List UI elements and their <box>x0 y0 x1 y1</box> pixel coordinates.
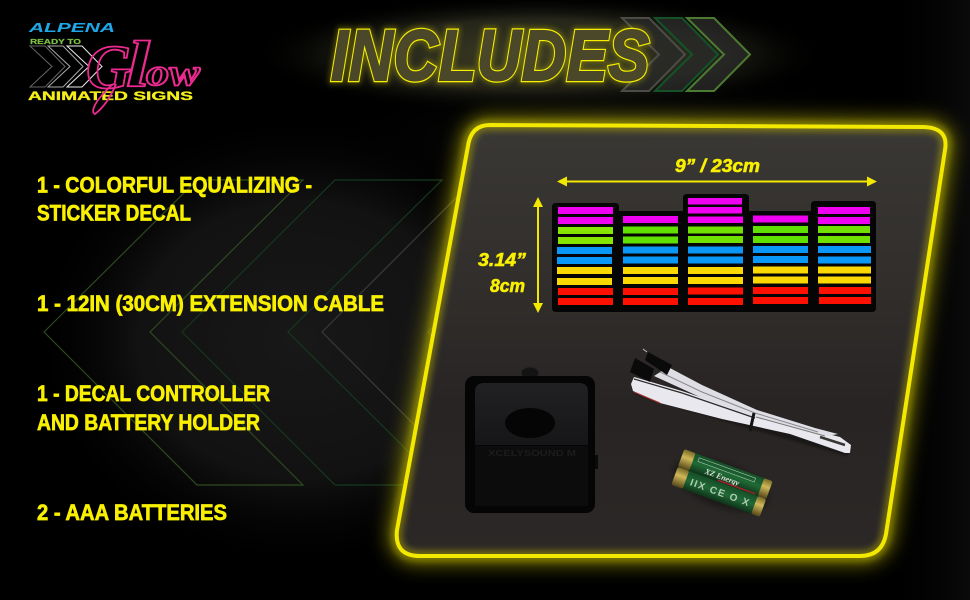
logo: Glow script: G <box>86 34 131 102</box>
cable shadow <box>634 388 852 456</box>
battery bottom: IIX CE O X <box>688 477 751 509</box>
item: batteries: 2 - AAA BATTERIES <box>37 500 227 525</box>
battery top: XZ Energy <box>703 466 741 488</box>
left chevron watermark <box>44 180 580 485</box>
column 4 <box>753 216 808 304</box>
height dimension label: 3.14” <box>478 249 527 270</box>
item: extension cable: 1 - 12IN (30CM) EXTENSION CABLE <box>37 291 384 316</box>
column 2 <box>623 216 678 305</box>
column 3 <box>688 198 743 305</box>
item: controller <box>37 381 270 435</box>
logo <box>27 20 201 114</box>
lower ribbon <box>631 377 851 453</box>
item: sticker decal: 1 - COLORFUL EQUALIZING - <box>37 172 312 198</box>
panel: neon frame <box>397 125 946 556</box>
logo: animated signs: ANIMATED SIGNS <box>28 89 193 103</box>
title: INCLUDES: INCLUDES <box>331 17 650 96</box>
title: INCLUDES: INCLUDES <box>331 17 650 96</box>
height dimension label <box>478 249 527 296</box>
item: sticker decal: STICKER DECAL <box>37 200 191 226</box>
ribbon details <box>634 372 845 445</box>
controller embossed text: XCELYSOUND M <box>488 449 576 458</box>
logo: white chevrons <box>30 46 102 87</box>
logo: Glow script: ow <box>146 52 201 94</box>
extension cable <box>630 349 852 456</box>
item: controller: AND BATTERY HOLDER <box>37 410 260 435</box>
equalizer sticker decal <box>552 194 876 312</box>
logo: Alpena wordmark: ALPENA <box>27 20 115 35</box>
logo: Glow script: l <box>126 28 151 101</box>
list of included items <box>37 172 384 525</box>
width dimension label: 9” / 23cm <box>675 155 760 176</box>
height dimension label: 8cm <box>490 275 525 296</box>
controller and battery holder <box>465 367 598 513</box>
width arrow <box>557 176 877 186</box>
title: INCLUDES: INCLUDES <box>331 17 650 96</box>
logo: ready to: READY TO <box>30 39 82 46</box>
AAA batteries <box>667 447 776 523</box>
item: controller: 1 - DECAL CONTROLLER <box>37 381 270 406</box>
column 1 <box>557 207 613 305</box>
item: sticker decal <box>37 172 312 226</box>
cable connectors <box>630 349 672 382</box>
logo: Glow script <box>86 28 201 114</box>
upper ribbon <box>654 367 838 436</box>
title chevrons <box>622 18 750 91</box>
column 5 <box>818 207 871 304</box>
height arrow <box>533 197 543 313</box>
